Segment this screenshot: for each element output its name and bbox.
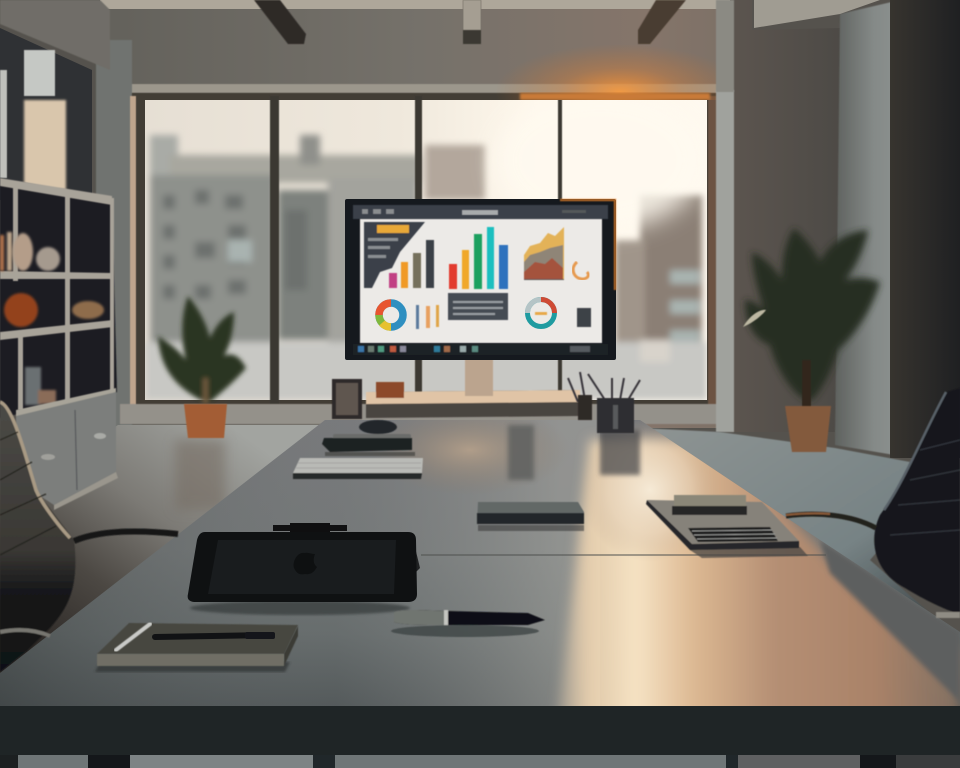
monitor top bar bbox=[362, 209, 586, 215]
main window with city view bbox=[120, 90, 725, 424]
centre bar chart bbox=[449, 227, 508, 289]
small swirl icon bbox=[573, 262, 588, 279]
pen holders bbox=[568, 372, 640, 433]
conference table bbox=[0, 405, 960, 755]
left wall and side window bbox=[0, 0, 110, 200]
pen bbox=[391, 610, 545, 637]
floor plant bbox=[743, 228, 880, 452]
city skyline bbox=[145, 90, 707, 400]
tablet bbox=[188, 523, 420, 615]
apple-style logo bbox=[294, 553, 317, 574]
plant on window ledge bbox=[158, 296, 246, 438]
bookshelf bbox=[0, 178, 118, 510]
mini bars bbox=[416, 305, 439, 329]
keyboard bbox=[293, 458, 423, 479]
monitor dashboard bbox=[345, 199, 616, 360]
centre notebook bbox=[477, 502, 584, 531]
right walls bbox=[716, 0, 960, 458]
shelf ornaments bbox=[0, 232, 104, 405]
dark text panel bbox=[448, 293, 508, 320]
donut chart right bbox=[528, 300, 554, 326]
dark info panel bbox=[364, 222, 425, 288]
monitor stand bbox=[465, 358, 493, 396]
floor bbox=[0, 425, 960, 690]
window mullions bbox=[270, 96, 562, 404]
mouse and phone stack bbox=[322, 420, 415, 456]
area chart bbox=[524, 227, 564, 280]
ceiling light rails bbox=[254, 0, 686, 44]
sun flare bbox=[506, 51, 716, 100]
calculator and notebook stack bbox=[646, 495, 808, 558]
shelf cabinet bbox=[16, 388, 118, 510]
right chair bbox=[786, 388, 960, 618]
floor strip under table bbox=[0, 752, 960, 768]
donut chart left bbox=[379, 303, 403, 327]
small stats tile bbox=[577, 308, 591, 327]
notepad with pens bbox=[95, 623, 298, 672]
back credenza bbox=[332, 379, 580, 419]
left chair bbox=[0, 402, 178, 672]
monitor taskbar bbox=[353, 344, 608, 355]
left bar chart bbox=[389, 240, 434, 288]
